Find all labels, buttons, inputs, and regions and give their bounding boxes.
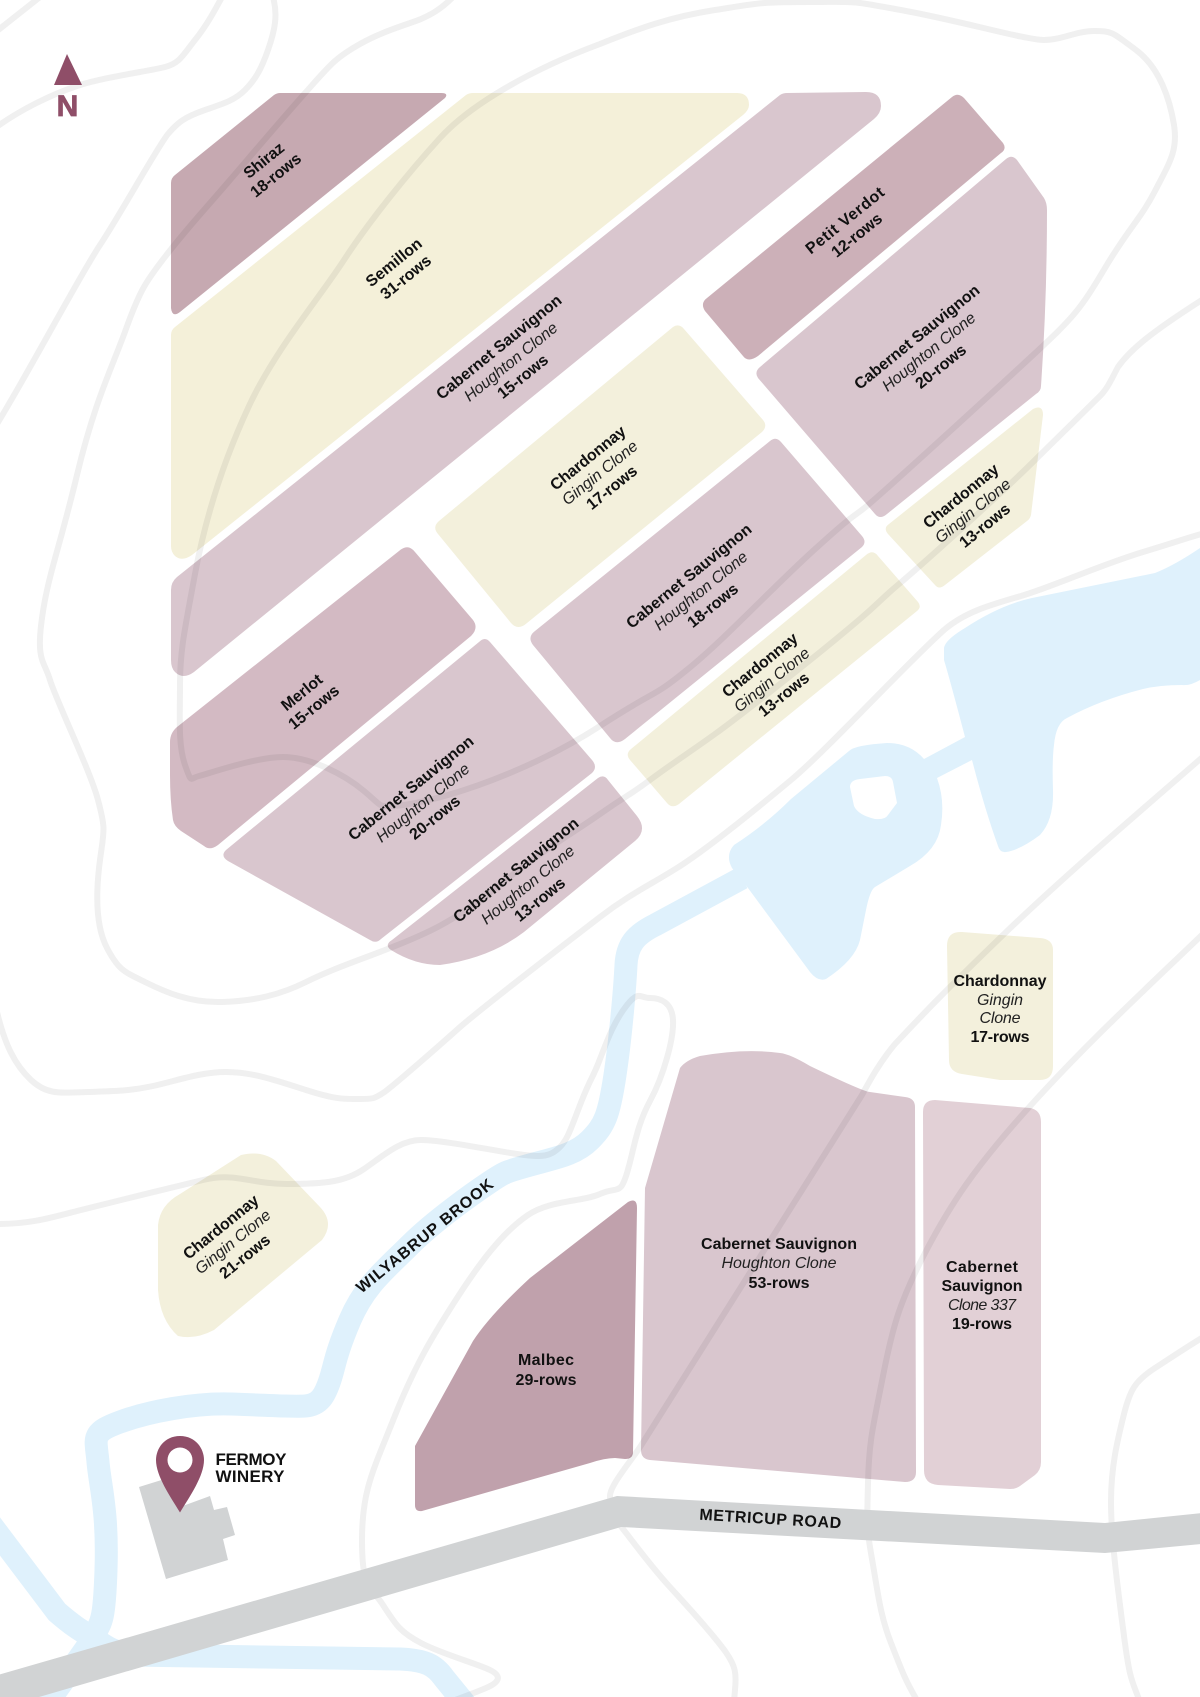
label: Cabernet Sauvignon 20 rows	[851, 282, 1007, 423]
label: Chardonnay 13 rows strip: Chardonnay	[719, 630, 802, 701]
label: Chardonnay 21 rows: 21-rows	[217, 1232, 274, 1283]
label: Cabernet Sauvignon 53 rows: Cabernet Sauvignon	[701, 1236, 857, 1253]
label: Chardonnay 21 rows	[180, 1192, 286, 1293]
label: Shiraz: Shiraz	[241, 140, 288, 182]
water: lower stream	[0, 1510, 466, 1697]
label: Chardonnay 21 rows: Chardonnay	[180, 1192, 263, 1263]
label: Cabernet Sauvignon 20 rows: 20-rows	[913, 342, 970, 393]
plot: Semillon	[171, 93, 749, 559]
label: Chardonnay 13 rows strip: 13-rows	[756, 670, 813, 721]
label: Cabernet Sauvignon 20 rows south west: Houghton Clone	[373, 761, 473, 846]
plot: Chardonnay 13 rows strip	[628, 552, 920, 806]
plot: Shiraz	[171, 93, 446, 314]
label: Cabernet Sauvignon 20 rows south west: 20-rows	[407, 793, 464, 844]
label: Cabernet Sauvignon 20 rows: Houghton Clone	[879, 310, 979, 395]
label: Cabernet Sauvignon 15 rows	[433, 292, 589, 433]
label: Semillon: 31-rows	[378, 252, 435, 303]
label: Malbec	[516, 1352, 577, 1389]
label: Fermoy Winery	[216, 1450, 287, 1486]
label: Chardonnay 21 rows: Gingin Clone	[192, 1207, 274, 1278]
label: Chardonnay 17 rows south east: Gingin	[977, 992, 1023, 1009]
label: Fermoy Winery: WINERY	[216, 1467, 285, 1486]
label: Semillon	[363, 235, 438, 305]
label: Merlot: Merlot	[278, 671, 327, 715]
plot: Cabernet Sauvignon 15 rows	[171, 92, 881, 676]
icon: north arrow: N	[57, 90, 78, 123]
label: Chardonnay 13 rows strip	[719, 630, 825, 731]
label: Cabernet Sauvignon 53 rows: 53-rows	[748, 1275, 810, 1292]
label: Cabernet Sauvignon 13 rows	[450, 815, 606, 956]
label: Cabernet Sauvignon 53 rows: Houghton Clone	[722, 1255, 837, 1272]
label: Cabernet Sauvignon 18 rows: Cabernet Sauvignon	[623, 521, 755, 632]
label: Shiraz: 18-rows	[248, 150, 305, 201]
plot: Cabernet Sauvignon 20 rows north east	[756, 157, 1047, 517]
plot: Cabernet Sauvignon Clone 337	[923, 1100, 1041, 1489]
label: Chardonnay 17 rows south east	[954, 973, 1047, 1046]
plot: Chardonnay 17 rows centre	[435, 325, 765, 627]
plot: Chardonnay 17 rows south east	[947, 932, 1053, 1080]
plot: Cabernet Sauvignon 53 rows	[641, 1051, 916, 1482]
label: Chardonnay 17 rows south east: Chardonnay	[954, 973, 1047, 990]
label: Cabernet Sauvignon 20 rows south west	[345, 733, 501, 874]
plot: Chardonnay 21 rows	[158, 1153, 328, 1337]
plot: Cabernet Sauvignon 20 rows south west	[223, 639, 595, 942]
label: Cabernet Sauvignon Clone 337: Sauvignon	[942, 1278, 1022, 1295]
road label: Metricup Road: METRICUP ROAD	[699, 1507, 842, 1532]
label: Cabernet Sauvignon Clone 337: 19-rows	[952, 1316, 1012, 1333]
label: Shiraz	[236, 135, 305, 201]
label: Cabernet Sauvignon 18 rows: 18-rows	[685, 581, 742, 632]
icon: location pin	[156, 1436, 204, 1512]
label: Malbec: 29-rows	[516, 1372, 577, 1389]
label: Chardonnay 17 rows: 17-rows	[584, 463, 641, 514]
label: Chardonnay 13 rows: 13-rows	[957, 501, 1014, 552]
label: Cabernet Sauvignon 13 rows: 13-rows	[512, 875, 569, 926]
label: Cabernet Sauvignon Clone 337: Clone 337	[948, 1297, 1017, 1314]
icon: north arrow	[54, 54, 82, 123]
label: Malbec: Malbec	[518, 1352, 574, 1369]
road: Metricup Road	[0, 1496, 1200, 1697]
label: Cabernet Sauvignon 15 rows: 15-rows	[495, 352, 552, 403]
plot: Cabernet Sauvignon 13 rows	[388, 776, 642, 965]
label: Petit Verdot: 12-rows	[829, 210, 886, 261]
water: Wilyabrup Brook stream	[46, 878, 742, 1697]
plot: Petit Verdot	[703, 95, 1005, 360]
label: Cabernet Sauvignon 13 rows: Cabernet Sauvignon	[450, 815, 582, 926]
stream label: Wilyabrup Brook: WILYABRUP BROOK	[353, 1176, 497, 1297]
label: Cabernet Sauvignon 18 rows: Houghton Clone	[651, 549, 751, 634]
label: Chardonnay 17 rows	[547, 423, 653, 524]
label: Chardonnay 13 rows: Gingin Clone	[932, 476, 1014, 547]
label: Chardonnay 13 rows strip: Gingin Clone	[731, 645, 813, 716]
label: Chardonnay 17 rows south east: 17-rows	[970, 1029, 1030, 1046]
label: Cabernet Sauvignon 18 rows	[623, 521, 779, 662]
label: Merlot: 15-rows	[286, 682, 343, 733]
label: Cabernet Sauvignon 13 rows: Houghton Clone	[478, 843, 578, 928]
label: Cabernet Sauvignon Clone 337: Cabernet	[946, 1259, 1019, 1276]
water: dam and lake	[729, 548, 1200, 980]
label: Cabernet Sauvignon Clone 337	[942, 1259, 1022, 1333]
label: Chardonnay 17 rows: Gingin Clone	[559, 438, 641, 509]
plot: Merlot	[170, 547, 476, 848]
label: Chardonnay 17 rows: Chardonnay	[547, 423, 630, 494]
label: Cabernet Sauvignon 15 rows: Cabernet Sauvignon	[433, 292, 565, 403]
plot: Chardonnay 13 rows north east	[886, 407, 1043, 588]
label: Chardonnay 13 rows: Chardonnay	[920, 461, 1003, 532]
plot: Cabernet Sauvignon 18 rows	[530, 439, 864, 742]
label: Semillon: Semillon	[363, 235, 426, 291]
plot: Malbec	[415, 1200, 637, 1511]
label: Petit Verdot: Petit Verdot	[803, 184, 889, 258]
label: Cabernet Sauvignon 20 rows: Cabernet Sauvignon	[851, 282, 983, 393]
label: Chardonnay 17 rows south east: Clone	[980, 1010, 1021, 1027]
winery building	[139, 1478, 235, 1579]
label: Chardonnay 13 rows	[920, 461, 1026, 562]
label: Cabernet Sauvignon 15 rows: Houghton Clone	[461, 320, 561, 405]
label: Merlot	[274, 667, 343, 733]
label: Cabernet Sauvignon 53 rows	[701, 1236, 857, 1292]
label: Fermoy Winery: FERMOY	[216, 1450, 287, 1469]
label: Cabernet Sauvignon 20 rows south west: Cabernet Sauvignon	[345, 733, 477, 844]
